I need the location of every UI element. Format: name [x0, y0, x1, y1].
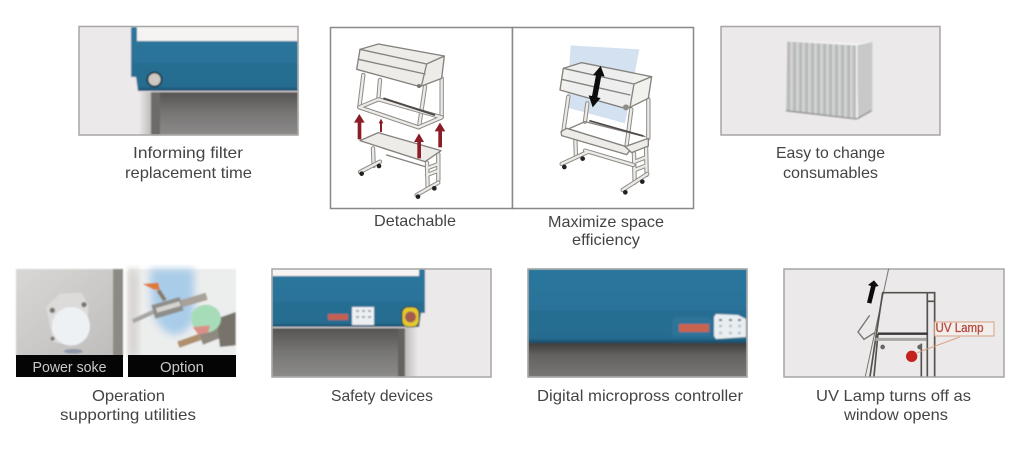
panel: consumables: [721, 26, 940, 182]
keypad: [352, 307, 374, 325]
label: UV Lamp: UV Lamp: [936, 320, 984, 335]
panel: maximize space: [512, 28, 694, 249]
caption: Digital micropross controller: [537, 388, 744, 405]
illustration: cabinet with raised sash: [560, 45, 652, 195]
marker: UV lamp: [906, 351, 917, 362]
caption: Easy to change: [776, 145, 885, 162]
panel: UV lamp: [784, 269, 1004, 424]
icon: indicator lamp: [148, 72, 162, 86]
image: hood front with controller: [528, 269, 747, 377]
panel: safety devices: [272, 269, 491, 405]
label: Power soke: [32, 360, 106, 376]
panel: digital controller: [528, 269, 747, 405]
image: power socket: [16, 269, 123, 377]
diagram: cabinet side view: [858, 269, 994, 376]
caption: window opens: [843, 407, 948, 424]
arrow: up and down: [589, 66, 605, 107]
icon: emergency stop button: [402, 307, 419, 327]
image: filter cartridge: [786, 41, 872, 119]
caption: Maximize space: [548, 214, 664, 231]
keypad: [714, 314, 746, 339]
arrow: window opening: [867, 280, 879, 304]
caption: Safety devices: [331, 388, 433, 405]
caption: replacement time: [125, 165, 252, 182]
display: [328, 314, 348, 320]
image: option valves: [128, 269, 236, 377]
panel: detachable: [330, 28, 512, 230]
caption: supporting utilities: [60, 407, 196, 424]
caption: Detachable: [374, 213, 456, 230]
caption: consumables: [783, 165, 878, 182]
caption: UV Lamp turns off as: [816, 388, 971, 405]
image: blue hood with indicator: [79, 27, 298, 135]
panel: filter replacement: [79, 26, 298, 182]
caption: Informing filter: [133, 145, 244, 162]
illustration: cabinet lifted from stand: [354, 44, 445, 199]
panel: operation utilities: [16, 269, 236, 424]
image: hood with emergency stop: [272, 269, 491, 377]
arrows: lift direction: [354, 114, 445, 158]
display: [672, 317, 712, 336]
caption: Operation: [92, 388, 165, 405]
label: Option: [160, 360, 204, 376]
caption: efficiency: [572, 232, 640, 249]
